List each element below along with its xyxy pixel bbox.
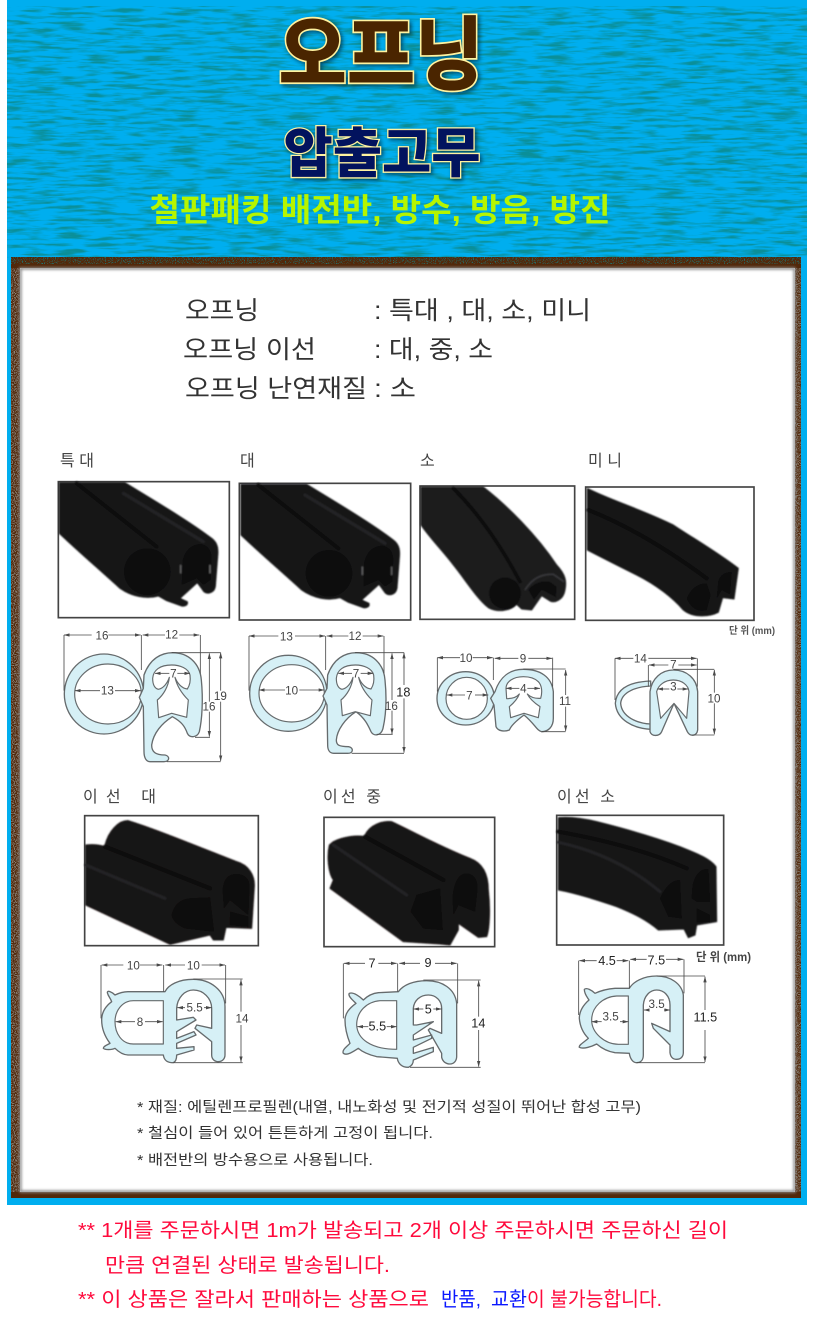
diagram: small dimensions — [437, 652, 571, 732]
diagram: 이선 medium dimensions: 5 — [425, 1002, 432, 1016]
text block: material notes: * 재질: 에틸렌프로필렌(내열, 내노화성 및 전기적 성질이 뛰어난 합성 고무) — [137, 1099, 641, 1116]
callout: ordering notice: 이 불가능합니다. — [527, 1288, 662, 1311]
photo: extra large profile — [58, 482, 229, 618]
diagram: extra large dimensions: 13 — [101, 685, 114, 698]
diagram: mini dimensions — [615, 652, 721, 735]
diagram: 이선 medium dimensions: 5.5 — [369, 1020, 386, 1034]
photo: double-lobe medium — [324, 817, 495, 947]
diagram: 이선 large dimensions: 14 — [236, 1013, 249, 1026]
diagram: mini dimensions: 7 — [670, 659, 677, 672]
text block: product line-up: 오프닝 난연재질 — [185, 375, 367, 403]
photo: mini profile — [586, 487, 754, 620]
photo: large profile — [239, 483, 411, 620]
diagram: mini dimensions: 10 — [708, 692, 721, 705]
text block: material notes: * 배전반의 방수용으로 사용됩니다. — [137, 1152, 373, 1169]
diagram: large dimensions: 7 — [353, 667, 359, 680]
panel: white content area with speckled brown frame — [11, 257, 801, 1198]
text block: product line-up: 오프닝 이선 — [183, 336, 316, 364]
callout: ordering notice — [78, 1219, 728, 1311]
diagram: extra large dimensions: 7 — [170, 667, 177, 680]
diagram: 이선 small dimensions: 3.5 — [603, 1011, 619, 1024]
text block: product line-up: : 소 — [374, 375, 416, 403]
label: 대: 대 — [240, 452, 255, 470]
label: 미니: 미니 — [588, 452, 622, 470]
text block: product line-up: 오프닝 — [185, 297, 259, 325]
unit note: second row: 단 위 (mm) — [696, 950, 751, 964]
label: 이선 대: 이선 대 — [83, 788, 156, 806]
title: 오프닝: 오프닝 — [278, 11, 484, 100]
diagram: 이선 large dimensions: 5.5 — [187, 1002, 203, 1015]
diagram: 이선 large dimensions: 10 — [187, 959, 200, 972]
text block: material notes — [137, 1099, 641, 1169]
photo: double-lobe large — [85, 816, 258, 946]
diagram: 이선 large dimensions: 10 — [127, 959, 140, 972]
diagram: extra large dimensions: 19 — [214, 690, 227, 703]
diagram: large dimensions: 12 — [349, 630, 361, 643]
text block: material notes: * 철심이 들어 있어 튼튼하게 고정이 됩니다. — [137, 1125, 433, 1142]
diagram: 이선 small dimensions: 3.5 — [649, 998, 665, 1011]
callout: ordering notice: 만큼 연결된 상태로 발송됩니다. — [105, 1254, 390, 1277]
diagram: large dimensions: 13 — [280, 631, 293, 644]
text block: product line-up: : 대, 중, 소 — [374, 336, 493, 364]
callout: ordering notice: 교환 — [491, 1288, 527, 1311]
diagram: 이선 small dimensions: 11.5 — [693, 1010, 717, 1024]
callout: ordering notice: 반품, — [441, 1288, 481, 1311]
diagram: 이선 small dimensions: 7.5 — [648, 953, 665, 967]
diagram: large dimensions: 18 — [396, 686, 410, 700]
diagram: mini dimensions: 3 — [670, 680, 677, 693]
diagram: 이선 medium dimensions: 7 — [368, 957, 376, 971]
photo: double-lobe small — [557, 815, 724, 945]
diagram: small dimensions: 11 — [559, 695, 571, 708]
diagram: 이선 medium dimensions — [343, 956, 485, 1067]
diagram: small dimensions: 10 — [460, 652, 473, 665]
diagram: 이선 large dimensions — [101, 959, 249, 1063]
text block: product line-up: : 특대 , 대, 소, 미니 — [374, 297, 591, 325]
subtitle: application list: 철판패킹 배전반, 방수, 방음, 방진 — [150, 192, 610, 228]
photo: small profile — [420, 486, 575, 619]
label: 이선 중: 이선 중 — [323, 788, 381, 806]
diagram: large dimensions: 10 — [285, 684, 299, 697]
diagram: mini dimensions: 14 — [634, 652, 647, 665]
diagram: small dimensions: 7 — [466, 689, 473, 702]
diagram: large dimensions: 16 — [385, 700, 398, 713]
diagram: extra large dimensions: 16 — [203, 701, 215, 714]
diagram: 이선 small dimensions: 4.5 — [598, 954, 616, 968]
diagram: 이선 medium dimensions: 9 — [424, 956, 432, 970]
diagram: extra large dimensions — [64, 628, 227, 762]
diagram: 이선 medium dimensions: 14 — [471, 1017, 485, 1031]
diagram: large dimensions — [249, 630, 410, 753]
label: 특대: 특대 — [60, 452, 94, 470]
label: 이선 소: 이선 소 — [557, 788, 615, 806]
diagram: small dimensions: 9 — [520, 653, 526, 666]
callout: ordering notice: ** 1개를 주문하시면 1m가 발송되고 2개 이상 주문하시면 주문하신 길이 — [78, 1219, 728, 1242]
diagram: small dimensions: 4 — [520, 682, 527, 695]
unit note: top row: 단 위 (mm) — [729, 624, 775, 637]
diagram: extra large dimensions: 12 — [165, 628, 178, 641]
diagram: 이선 large dimensions: 8 — [137, 1016, 143, 1029]
diagram: extra large dimensions: 16 — [96, 629, 108, 642]
label: 소: 소 — [420, 453, 435, 470]
text block: product line-up — [183, 297, 591, 403]
callout: ordering notice: ** 이 상품은 잘라서 판매하는 상품으로 — [78, 1288, 429, 1311]
heading: 압출고무: 압출고무 — [284, 124, 480, 184]
diagram: 이선 small dimensions — [579, 953, 717, 1063]
